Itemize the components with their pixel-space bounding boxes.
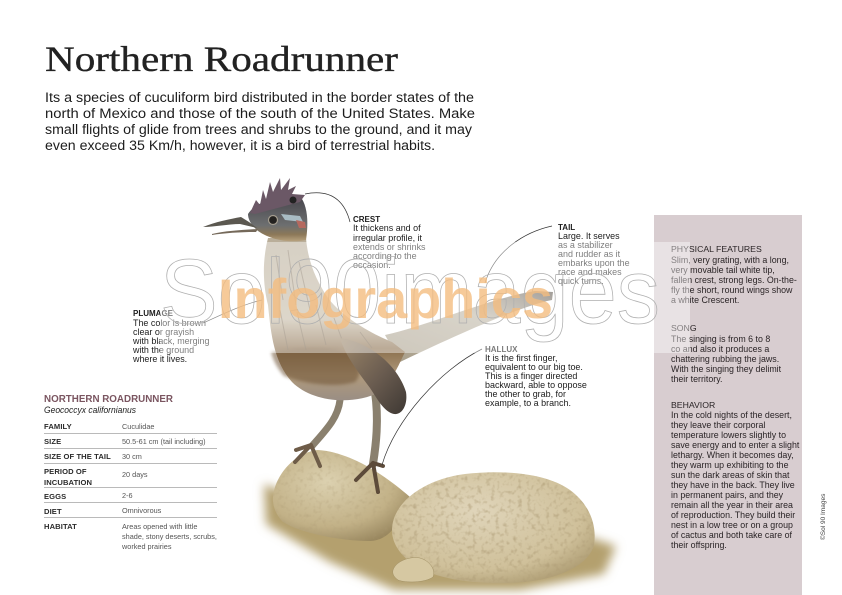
callout: hallux: equivalent to our big toe. <box>485 362 583 372</box>
data table: DIET <box>44 507 62 516</box>
panel text: physical features: fly the short, round wings show <box>671 285 793 295</box>
intro paragraph: even exceed 35 Km/h, however, it is a bird of terrestrial habits. <box>45 138 435 154</box>
panel text: physical features: PHYSICAL FEATURES <box>671 244 762 254</box>
panel text: song: The singing is from 6 to 8 <box>671 334 770 344</box>
panel text: behavior: nest in a low tree or on a group <box>671 520 793 530</box>
callout: crest: irregular profile, it <box>353 233 423 243</box>
callout: crest: occasion. <box>353 260 391 270</box>
data table: HABITAT <box>44 522 77 531</box>
scientific name: Geococcyx californianus <box>44 405 136 415</box>
data table: Areas opened with little <box>122 522 197 531</box>
panel text: physical features: fallen crest, strong legs. On-the- <box>671 275 797 285</box>
callout: tail: TAIL <box>558 223 575 232</box>
data table: shade, stony deserts, scrubs, <box>122 532 217 541</box>
eye patch <box>281 214 303 222</box>
panel text: behavior: they have in the back. They live <box>671 480 795 490</box>
intro paragraph: Its a species of cuculiform bird distributed in the border states of the <box>45 90 474 106</box>
panel text: behavior: temperature lowers slightly to <box>671 430 786 440</box>
callout: plumage: clear or grayish <box>133 327 194 337</box>
data table: 20 days <box>122 470 148 479</box>
illustration: roadrunner <box>203 178 553 492</box>
callout: tail: embarks upon the <box>558 258 630 268</box>
panel text: song: SONG <box>671 323 697 333</box>
data table: 50.5-61 cm (tail including) <box>122 437 206 446</box>
crest <box>250 178 305 214</box>
panel text: song: their territory. <box>671 374 722 384</box>
panel text: behavior: of cactus and both take care of <box>671 530 792 540</box>
callout: hallux <box>485 345 587 408</box>
crest dark spot <box>290 196 296 204</box>
tail <box>385 291 553 362</box>
callout: plumage: PLUMAGE <box>133 309 174 318</box>
callout: plumage: The color is brown <box>133 318 206 328</box>
eye <box>268 216 278 224</box>
data table: worked prairies <box>121 542 172 551</box>
panel text: behavior: in permanent pairs, and they <box>671 490 784 500</box>
panel text: physical features: a white Crescent. <box>671 295 739 305</box>
panel text: behavior: lethargy. When it becomes day, <box>671 450 794 460</box>
data table: 2-6 <box>122 491 133 500</box>
data table: FAMILY <box>44 422 72 431</box>
panel: side information background <box>654 215 802 595</box>
callout: plumage: with the ground <box>132 345 194 355</box>
watermark: outline wordmark: Sol90images <box>160 241 660 343</box>
panel text: physical features <box>671 244 797 305</box>
callout: plumage: with black, merging <box>132 336 210 346</box>
panel text: behavior: they warm up exhibiting to the <box>671 460 789 470</box>
callout: crest <box>353 215 426 270</box>
data table: EGGS <box>44 492 66 501</box>
data table: PERIOD OF <box>44 467 87 476</box>
panel text: physical features: Slim, very grating, with a long, <box>671 255 789 265</box>
data table: Cuculidae <box>122 422 154 431</box>
panel text: behavior: In the cold nights of the desert, <box>671 410 792 420</box>
callout: hallux: the other to grab, for <box>485 389 566 399</box>
sandy ground <box>264 484 616 590</box>
callout: tail: as a stabilizer <box>558 240 613 250</box>
panel text: behavior: save energy and to enter a slight <box>671 440 800 450</box>
panel text: song: With the singing they delimit <box>671 364 782 374</box>
rock: pebble <box>393 558 434 582</box>
chest streaks <box>276 250 372 350</box>
callout: tail <box>558 223 630 286</box>
data table: Omnivorous <box>122 506 162 515</box>
callout: crest: extends or shrinks <box>353 242 426 252</box>
panel text: behavior: of reproduction. They build their <box>671 510 795 520</box>
callout: hallux: This is a finger directed <box>485 371 577 381</box>
panel text: song: chattering rubbing the jaws. <box>671 354 779 364</box>
beak <box>203 217 257 228</box>
data table: 30 cm <box>122 452 142 461</box>
watermark: infographics wordmark: Infographics <box>218 267 553 330</box>
callout: crest: It thickens and of <box>353 223 421 233</box>
callout: hallux: It is the first finger, <box>485 353 558 363</box>
watermark: translucent band <box>160 242 690 353</box>
callout lines <box>203 193 552 465</box>
callout: tail: quick turns. <box>558 276 604 286</box>
callout: tail: and rudder as it <box>558 249 621 259</box>
callout: tail: Large. It serves <box>558 231 620 241</box>
callout: plumage: where it lives. <box>132 354 187 364</box>
panel text: behavior: BEHAVIOR <box>671 400 715 410</box>
data table <box>44 394 217 551</box>
title: Northern Roadrunner <box>45 39 398 79</box>
data table: SIZE OF THE TAIL <box>44 452 111 461</box>
panel text: behavior: sun the dark areas of skin that <box>671 470 790 480</box>
panel text: behavior <box>671 400 800 550</box>
rock: large boulder <box>392 472 595 583</box>
rock: left boulder <box>273 450 410 541</box>
intro paragraph: small flights of glide from trees and shrubs to the ground, and it may <box>45 122 473 138</box>
callout: hallux: HALLUX <box>485 345 518 354</box>
intro paragraph <box>45 90 475 154</box>
callout: hallux: backward, able to oppose <box>485 380 587 390</box>
callout: crest: CREST <box>353 215 380 224</box>
illustration: ground and rocks <box>264 450 616 590</box>
body <box>264 238 405 400</box>
panel text: song: co and also it produces a <box>671 344 769 354</box>
panel text: behavior: their offspring. <box>671 540 727 550</box>
callout: tail: race and makes <box>558 267 622 277</box>
panel text: behavior: they leave their corporal <box>671 420 765 430</box>
chest brown band <box>271 348 359 385</box>
intro paragraph: north of Mexico and those of the south of the United States. Make <box>45 106 475 122</box>
callout: crest: according to the <box>353 251 417 261</box>
data table: INCUBATION <box>44 478 92 487</box>
copyright note: ©Sol 90 Images <box>819 493 827 540</box>
table heading: NORTHERN ROADRUNNER <box>44 394 174 405</box>
head <box>248 196 307 241</box>
callout: plumage <box>132 309 210 364</box>
panel text: song <box>671 323 782 384</box>
panel text: behavior: remain all the year in their area <box>671 500 793 510</box>
wing <box>340 338 406 414</box>
callout: hallux: example, to a branch. <box>485 398 571 408</box>
legs and feet <box>295 392 383 492</box>
panel text: physical features: very movable tail white tip, <box>671 265 775 275</box>
data table: SIZE <box>44 437 61 446</box>
